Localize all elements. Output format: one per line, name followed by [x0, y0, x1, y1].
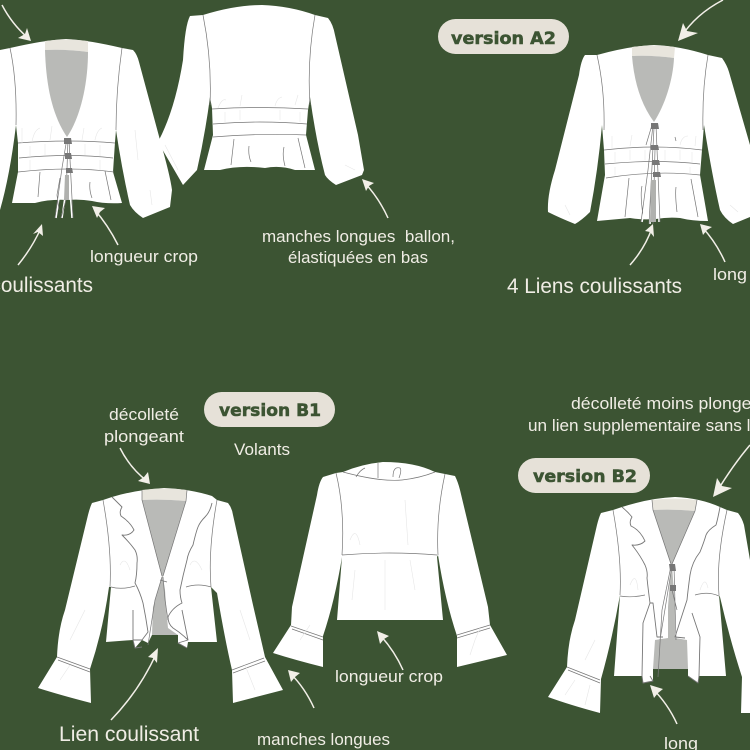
arrow: B2 longueur: [650, 685, 677, 724]
garment: version A2 front: [548, 45, 750, 224]
label: longueur crop A1: longueur crop: [90, 247, 198, 266]
arrow: B1 neckline: [120, 448, 150, 484]
label: manches longues ballon: élastiquées en bas: [288, 248, 428, 267]
label: manches longues B1: manches longues: [257, 730, 390, 749]
arrow: A2 liens: [630, 224, 654, 265]
arrow: A1 neckline: [2, 5, 31, 41]
arrow: A2 longueur: [700, 224, 725, 262]
badge: version B1: version B1: [219, 401, 321, 421]
arrow: B1 manches: [288, 670, 314, 708]
badge: version B2: version B2: [533, 467, 637, 487]
label: décolleté moins plongeant: [528, 394, 750, 435]
badge: version A2: [438, 19, 569, 54]
arrow: B2 neckline: [713, 445, 750, 497]
arrow: A1 manches: [362, 179, 388, 218]
arrow: B1 longueur: [377, 631, 403, 670]
label: lien coulissant: Lien coulissant: [59, 722, 199, 746]
garment: version B1 front: [38, 488, 283, 703]
label: décolleté plongeant: plongeant: [104, 427, 184, 446]
label: volants: Volants: [234, 440, 290, 459]
arrow: A2 neckline: [678, 0, 723, 41]
badge: version B1: [204, 392, 335, 427]
badge: version B2: [518, 458, 650, 493]
garment: version A1 back: [158, 5, 364, 185]
garment: version B1 back: [273, 462, 507, 667]
label: décolleté plongeant: [104, 405, 184, 446]
label: décolleté plongeant: décolleté: [109, 405, 179, 424]
garment: version B2 front: [548, 497, 750, 713]
badge: version A2: version A2: [451, 29, 556, 49]
label: manches longues ballon: manches longues ballon,: [262, 227, 455, 246]
label: long A2: long: [713, 265, 747, 284]
garment: version A1 front: [0, 39, 172, 218]
label: longueur crop B1: longueur crop: [335, 667, 443, 686]
arrow: B1 lien: [111, 648, 158, 720]
label: 4 liens coulissants A2: 4 Liens coulissants: [507, 274, 682, 298]
arrow: A1 longueur: [92, 206, 118, 245]
arrow: A1 liens: [18, 224, 43, 265]
label: manches longues ballon: [262, 227, 455, 267]
